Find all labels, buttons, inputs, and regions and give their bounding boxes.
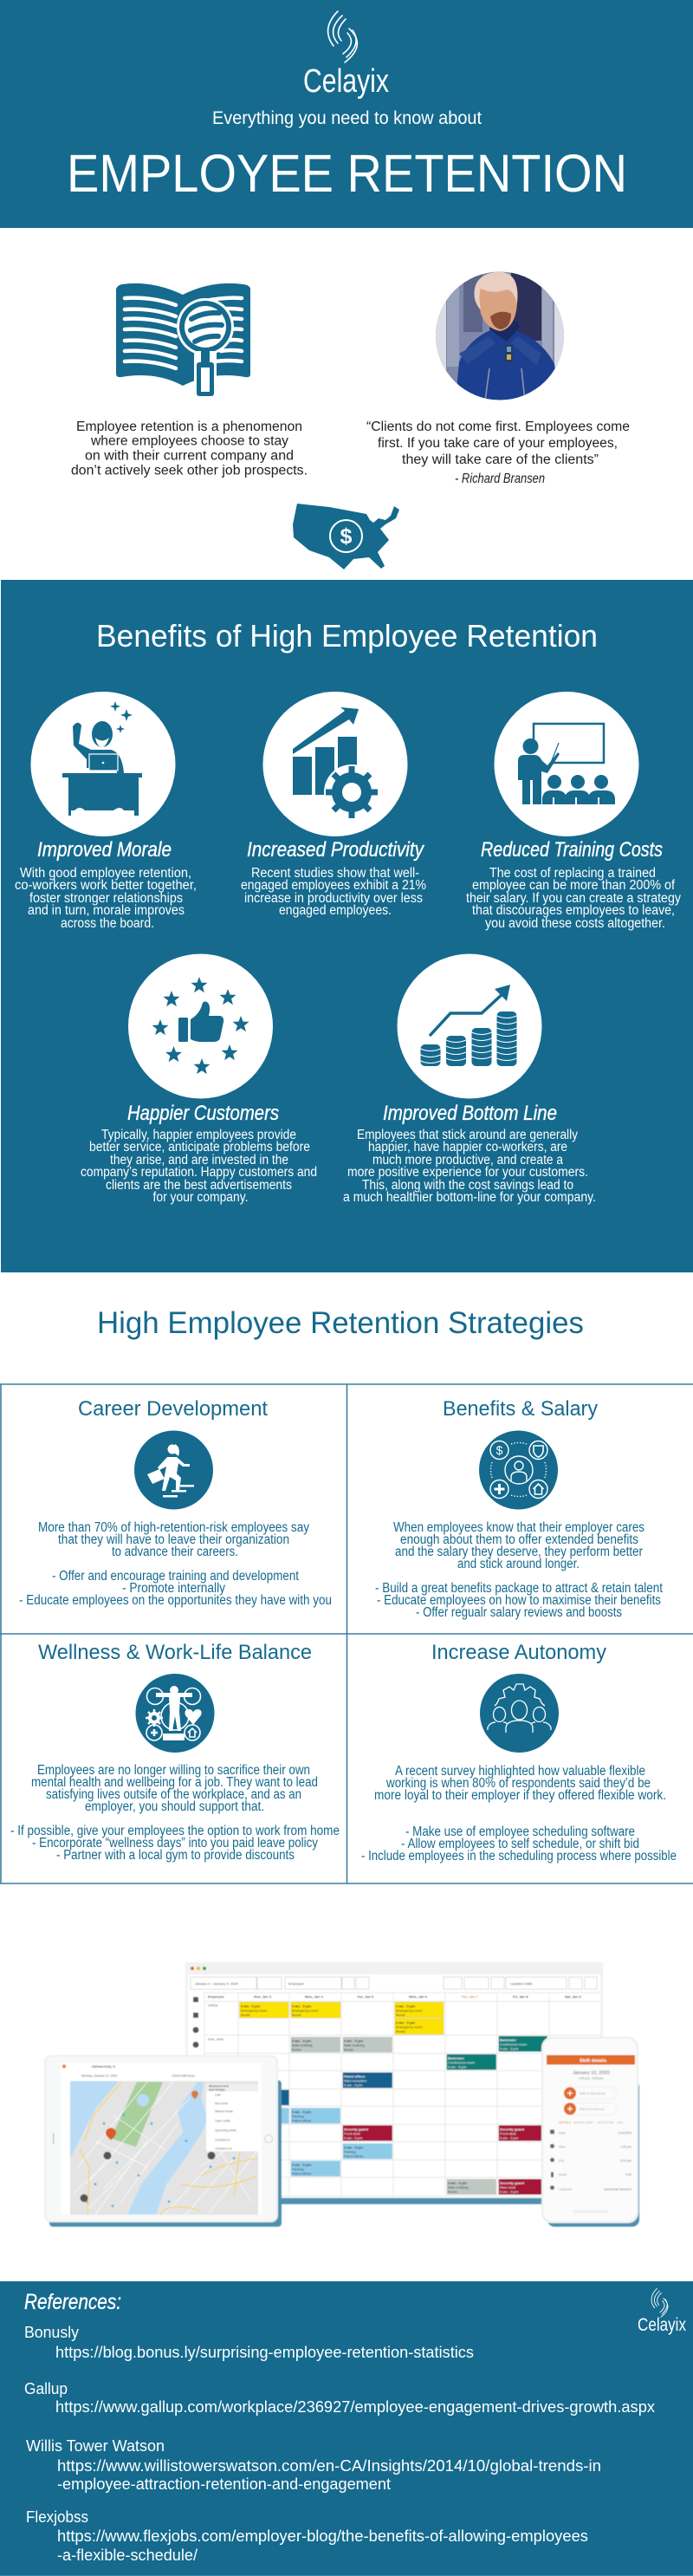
mobile phone with shift details: 5:00 pm xyxy=(620,2159,631,2163)
text: improved morale: across the board. xyxy=(61,916,154,931)
desktop scheduling window: 9 am - 5 pm xyxy=(500,2136,519,2140)
desktop scheduling window: Security guard xyxy=(500,2127,525,2131)
mobile phone with shift details xyxy=(541,2037,639,2227)
text: autonomy: - Allow employees to self schedule, or shift bid xyxy=(401,1837,639,1851)
text: definition: on with their current company and xyxy=(85,449,294,463)
icon: person climbing stairs xyxy=(134,1430,213,1510)
heading: references: References: xyxy=(24,2290,121,2314)
heading: strategies: High Employee Retention Strategies xyxy=(97,1306,584,1340)
text: benefits and salary: and the salary they deserve, they perform better xyxy=(395,1545,643,1559)
benefit: increased productivity xyxy=(241,692,426,918)
text: autonomy xyxy=(361,1764,677,1864)
icon: employee benefits: $ xyxy=(496,1443,503,1457)
reference list: https://blog.bonus.ly/surprising-employee-retention-statistics xyxy=(55,2343,474,2361)
text: definition: don’t actively seek other job prospects. xyxy=(71,463,308,478)
icon: trainer and audience xyxy=(518,724,615,804)
mobile phone with shift details: Customer xyxy=(559,2188,573,2191)
shift labels: 9 am - 5 pm xyxy=(396,2004,415,2008)
desktop scheduling window: Front desk xyxy=(344,2131,360,2136)
icon: team with gear xyxy=(480,1674,559,1753)
schedule grid xyxy=(204,1993,600,2195)
desktop scheduling window: 9 am - 5 pm xyxy=(448,2065,467,2069)
reference list: https://www.willistowerswatson.com/en-CA/Insights/2014/10/global-trends-in xyxy=(57,2456,601,2475)
reference list: Willis Tower Watson xyxy=(26,2436,165,2455)
text: definition: where employees choose to stay xyxy=(90,433,288,449)
desktop scheduling window: Front desk xyxy=(500,2131,516,2136)
text: wellness: - Partner with a local gym to provide discounts xyxy=(56,1848,295,1863)
shift labels: Nurse xyxy=(292,2047,301,2052)
subtitle: Everything you need to know about xyxy=(212,108,482,128)
mobile phone with shift details: 1:00 pm xyxy=(620,2145,631,2149)
mobile phone with shift details: Start xyxy=(559,2145,565,2149)
text: increased productivity: engaged employees exhibit a 21% xyxy=(241,878,426,893)
text: happier customers: better service, anticipate problems before xyxy=(89,1140,310,1155)
text: wellness: - If possible, give your employees the option to work from home xyxy=(10,1824,340,1838)
shift labels: Emergency room xyxy=(396,2025,423,2029)
mobile phone with shift details: Shift details xyxy=(580,2059,606,2064)
text: career development: that they will have to leave their organization xyxy=(58,1532,289,1547)
strategy: career development xyxy=(19,1397,332,1608)
text: career development xyxy=(19,1520,332,1608)
shift labels: 9 am - 5 pm xyxy=(292,2004,311,2008)
desktop scheduling window: Sat, Jan 9 xyxy=(565,1994,581,1999)
map: Upcoming shifts xyxy=(215,2129,236,2132)
desktop scheduling window: Security guard xyxy=(500,2181,525,2185)
desktop scheduling window: OPEN xyxy=(208,2003,217,2007)
mobile phone with shift details: 0:00 xyxy=(625,2173,631,2176)
desktop scheduling window: Employee xyxy=(208,1994,225,1999)
text: increased productivity: increase in productivity over less xyxy=(244,891,423,906)
shift labels: Patrol officer xyxy=(292,2118,312,2123)
mobile phone with shift details: Slide to Check out xyxy=(580,2108,604,2111)
text: autonomy: A recent survey highlighted how valuable flexible xyxy=(395,1764,645,1779)
heading: benefits: Benefits of High Employee Retention xyxy=(96,618,598,654)
map: Next shift xyxy=(215,2102,228,2105)
text: improved bottom line: Employees that stick around are generally xyxy=(357,1128,578,1142)
text: career development: to advance their careers. xyxy=(112,1545,238,1559)
shift labels: Emergency room xyxy=(241,2008,268,2013)
shift labels: Main building xyxy=(292,2043,313,2047)
text: career development: - Offer and encourage training and development xyxy=(52,1569,300,1584)
desktop scheduling window: 9 am - 5 pm xyxy=(500,2046,519,2051)
benefit: improved morale xyxy=(15,692,197,931)
text: benefits and salary xyxy=(375,1520,664,1620)
brand name: Celayix xyxy=(303,63,389,100)
mobile phone with shift details: 1/10/2020 xyxy=(618,2131,631,2135)
mobile phone with shift details: Break xyxy=(559,2173,567,2176)
text: autonomy: working is when 80% of respondents said they’d be xyxy=(385,1776,651,1791)
desktop scheduling window: 9 am - 5 pm xyxy=(344,2083,363,2087)
benefit: happier customers xyxy=(81,953,317,1205)
shift labels: Parking xyxy=(292,2167,304,2171)
icon: book with magnifier xyxy=(116,283,250,398)
mobile phone with shift details: 1:00 pm - 5:00 pm xyxy=(579,2077,603,2080)
subheading: autonomy: Increase Autonomy xyxy=(431,1641,606,1664)
desktop scheduling window: Thu, Jan 7 xyxy=(461,1994,479,1999)
desktop scheduling window: Sun, Jan 3 xyxy=(254,1994,272,1999)
text: career development: More than 70% of high-retention-risk employees say xyxy=(38,1520,309,1535)
text: reduced training costs xyxy=(466,866,681,931)
desktop scheduling window xyxy=(185,1962,606,2204)
reference list: Flexjobss xyxy=(26,2508,88,2526)
text: benefits and salary: enough about them to offer extended benefits xyxy=(400,1532,638,1547)
shift labels: 9 am - 5 pm xyxy=(292,2039,311,2043)
desktop scheduling window: Wed, Jan 6 xyxy=(409,1994,428,1999)
tablet with map: Monday, January 13, 2020 xyxy=(81,2074,117,2078)
shift labels: Nurse xyxy=(344,2047,353,2052)
text: increased productivity: Recent studies show that well- xyxy=(251,866,419,881)
text: benefits and salary: When employees know that their employer cares xyxy=(393,1520,644,1535)
reference list: Bonusly xyxy=(24,2323,80,2341)
text: happier customers: clients are the best advertisements xyxy=(106,1178,292,1193)
text: wellness: satisfying lives outsife of the workplace, and as an xyxy=(46,1787,301,1802)
shift labels: 9 am - 5 pm xyxy=(344,2039,363,2043)
reference list: Gallup xyxy=(24,2379,68,2397)
strategy: wellness and work-life balance xyxy=(10,1641,340,1863)
map: Checked out xyxy=(215,2147,232,2150)
reference list: -a-flexible-schedule/ xyxy=(57,2546,198,2564)
shift labels: 9 am - 5 pm xyxy=(292,2163,311,2167)
tablet with map: Fathima Kelly Jr. xyxy=(92,2065,116,2068)
text: benefits and salary: - Offer regualr salary reviews and boosts xyxy=(416,1605,622,1620)
icon: coin stacks with rising arrow xyxy=(421,985,516,1066)
desktop scheduling window: Conference room xyxy=(448,2060,476,2065)
text: wellness: mental health and wellbeing for a job. They want to lead xyxy=(31,1775,318,1790)
shift labels: Main building xyxy=(448,2185,469,2189)
icon: employee benefits xyxy=(479,1430,558,1510)
subheading: improved bottom line: Improved Bottom Line xyxy=(383,1102,557,1125)
reference list: https://www.gallup.com/workplace/236927/employee-engagement-drives-growth.aspx xyxy=(55,2397,656,2416)
text: autonomy: - Make use of employee scheduling software xyxy=(405,1825,635,1839)
desktop scheduling window: Bartender xyxy=(448,2056,464,2060)
mobile phone with shift details: LOG xyxy=(617,2121,624,2124)
desktop scheduling window: Main reception xyxy=(344,2078,366,2083)
tablet with map: Check shift in/out xyxy=(172,2074,195,2078)
text: happier customers: company’s reputation. Happy customers and xyxy=(81,1165,317,1180)
shift labels: Patrol officer xyxy=(292,2171,312,2176)
text: improved morale: and in turn, morale improves xyxy=(28,903,185,918)
mobile phone with shift details: STATUS xyxy=(573,2121,586,2124)
text: happier customers: for your company. xyxy=(152,1190,248,1205)
strategy: benefits and salary xyxy=(375,1397,664,1620)
reference list: -employee-attraction-retention-and-engagement xyxy=(57,2475,391,2493)
shift labels: 9 am - 5 pm xyxy=(241,2004,260,2008)
map xyxy=(70,2081,258,2215)
text: definition xyxy=(71,420,308,478)
shift labels: Parking xyxy=(292,2114,304,2118)
text: career development: - Promote internally xyxy=(122,1581,225,1596)
panel: strategies grid xyxy=(0,1384,693,1883)
desktop scheduling window: Bartender xyxy=(500,2038,516,2042)
subheading: happier customers: Happier Customers xyxy=(127,1102,279,1125)
text: improved morale: foster stronger relationships xyxy=(29,891,183,906)
mobile phone with shift details: ACTIVITIES xyxy=(598,2121,615,2124)
text: quote: “Clients do not come first. Employees come xyxy=(366,420,630,434)
text: happier customers: they arise, and are invested in the xyxy=(110,1153,288,1168)
photo: Richard Branson portrait xyxy=(436,271,565,407)
shift labels: 9 am - 5 pm xyxy=(292,2110,311,2114)
desktop scheduling window: Employee xyxy=(288,1981,305,1986)
panel: benefits xyxy=(1,580,693,1272)
text: improved morale: co-workers work better together, xyxy=(15,878,197,893)
shift labels: 9 am - 5 pm xyxy=(396,2020,415,2025)
strategy: increase autonomy xyxy=(361,1641,677,1864)
desktop scheduling window: Fri, Jan 8 xyxy=(513,1994,528,1999)
text: increased productivity: engaged employees. xyxy=(279,903,392,918)
map: Weekend Arts xyxy=(209,2085,229,2088)
text: wellness: - Encorporate “wellness days” into you paid leave policy xyxy=(32,1836,318,1851)
map: Checked in xyxy=(215,2138,230,2142)
desktop scheduling window: January 3 - January 9, 2020 xyxy=(195,1981,239,1986)
text: happier customers: Typically, happier employees provide xyxy=(101,1128,296,1142)
map: Open shifts xyxy=(215,2119,230,2123)
desktop scheduling window: Doe, John xyxy=(208,2037,223,2041)
text: quote: first. If you take care of your employees, xyxy=(378,436,618,451)
shift blocks xyxy=(239,2002,547,2195)
icon: USA map with dollar: $ xyxy=(340,524,353,549)
text: happier customers xyxy=(81,1128,317,1205)
text: quote xyxy=(366,420,630,486)
subheading: wellness: Wellness & Work-Life Balance xyxy=(38,1641,312,1664)
mobile phone with shift details: Ashmolean Museum xyxy=(604,2188,631,2191)
text: reduced training costs: employee can be more than 200% of xyxy=(472,878,676,893)
text: increased productivity xyxy=(241,866,426,918)
shift labels: Nurse xyxy=(448,2189,457,2194)
icon: USA map with dollar xyxy=(293,504,399,569)
text: career development: - Educate employees on the opportunites they have with you xyxy=(19,1593,332,1608)
shift labels xyxy=(241,2004,469,2194)
mobile phone with shift details: DETAILS xyxy=(559,2121,572,2124)
shift labels: Parking xyxy=(344,2150,356,2154)
mobile phone with shift details: Date xyxy=(559,2131,565,2135)
shift labels: Nurse xyxy=(396,2029,405,2033)
desktop scheduling window: Updated shifts xyxy=(510,1981,533,1986)
desktop scheduling window: Tue, Jan 5 xyxy=(357,1994,374,1999)
icon: wellness figure xyxy=(135,1674,215,1753)
desktop scheduling window: Security guard xyxy=(344,2127,369,2131)
text: improved morale: With good employee retention, xyxy=(20,866,191,881)
panel: introduction xyxy=(71,271,630,569)
mobile phone with shift details: Slide to Start Break xyxy=(580,2092,606,2096)
text: improved bottom line: happier, have happier co-workers, are xyxy=(368,1140,567,1155)
text: improved morale xyxy=(15,866,197,931)
text: improved bottom line: more positive experience for your customers. xyxy=(347,1165,588,1180)
text: definition: Employee retention is a phenomenon xyxy=(76,420,302,434)
shift labels: Emergency room xyxy=(396,2008,423,2013)
desktop scheduling window: Main desk xyxy=(500,2185,515,2189)
subheading: career development: Career Development xyxy=(78,1397,268,1421)
desktop scheduling window: Conference room xyxy=(500,2042,528,2046)
panel: scheduling software screenshots xyxy=(44,1962,639,2227)
icon: thumb up with stars xyxy=(152,977,249,1074)
text: improved bottom line: This, along with the cost savings lead to xyxy=(362,1178,573,1193)
shift labels: Main building xyxy=(344,2043,365,2047)
icon: small Celayix logo xyxy=(638,2288,686,2335)
icon: bars, arrow and gear xyxy=(293,707,379,820)
subheading: improved morale: Improved Morale xyxy=(37,838,172,862)
desktop scheduling window: 9 am - 5 pm xyxy=(500,2189,519,2194)
icon: Celayix logo xyxy=(328,11,357,62)
toolbar xyxy=(191,1977,597,1989)
text: improved bottom line: a much healthier bottom-line for your company. xyxy=(343,1190,596,1205)
desktop scheduling window: 9 am - 5 pm xyxy=(344,2136,363,2140)
shift labels: Nurse xyxy=(396,2013,405,2017)
text: improved bottom line xyxy=(343,1128,596,1205)
text: wellness: employer, you should support that. xyxy=(85,1799,264,1814)
text: reduced training costs: you avoid these costs altogether. xyxy=(485,916,665,931)
map: Missed break xyxy=(215,2110,233,2113)
shift labels: 9 am - 5 pm xyxy=(448,2181,467,2185)
text: quote: - Richard Bransen xyxy=(455,472,545,486)
text: reduced training costs: The cost of replacing a trained xyxy=(489,866,656,881)
subheading: increased productivity: Increased Productivity xyxy=(247,838,425,862)
shift labels: Patrol officer xyxy=(344,2154,364,2158)
text: reduced training costs: that discourages employees to leave, xyxy=(472,903,675,918)
map pins xyxy=(80,2091,215,2202)
panel: header xyxy=(0,0,693,228)
text: quote: they will take care of the clients” xyxy=(402,452,599,467)
benefit: improved bottom line xyxy=(343,953,596,1205)
tablet with map xyxy=(44,2055,282,2227)
text: benefits and salary: and stick around longer. xyxy=(457,1557,580,1571)
shift labels: 9 am - 5 pm xyxy=(344,2145,363,2150)
desktop scheduling window: Mon, Jan 4 xyxy=(305,1994,323,1999)
text: wellness: Employees are no longer willing to sacrifice their own xyxy=(37,1763,310,1778)
shift labels: Emergency room xyxy=(292,2008,319,2013)
shift labels: Nurse xyxy=(241,2013,250,2017)
desktop scheduling window: Patrol officer xyxy=(344,2074,366,2078)
icon: person at desk xyxy=(62,701,142,816)
mobile phone with shift details: MAP xyxy=(586,2121,593,2124)
panel: references xyxy=(0,2281,693,2576)
title: EMPLOYEE RETENTION xyxy=(67,144,627,203)
mobile phone with shift details: January 10, 2020 xyxy=(573,2071,610,2076)
shift labels: Nurse xyxy=(292,2013,301,2017)
reference list xyxy=(24,2323,656,2564)
mobile phone with shift details: End xyxy=(559,2159,564,2163)
map: and Design xyxy=(209,2088,225,2091)
map side panel xyxy=(206,2084,258,2151)
text: improved bottom line: much more productive, and create a xyxy=(372,1153,563,1168)
text: wellness xyxy=(10,1763,340,1863)
map: Late xyxy=(215,2093,221,2097)
benefit: reduced training costs xyxy=(466,692,681,931)
reference list: https://www.flexjobs.com/employer-blog/the-benefits-of-allowing-employees xyxy=(57,2527,588,2545)
subheading: benefits and salary: Benefits & Salary xyxy=(443,1397,598,1421)
